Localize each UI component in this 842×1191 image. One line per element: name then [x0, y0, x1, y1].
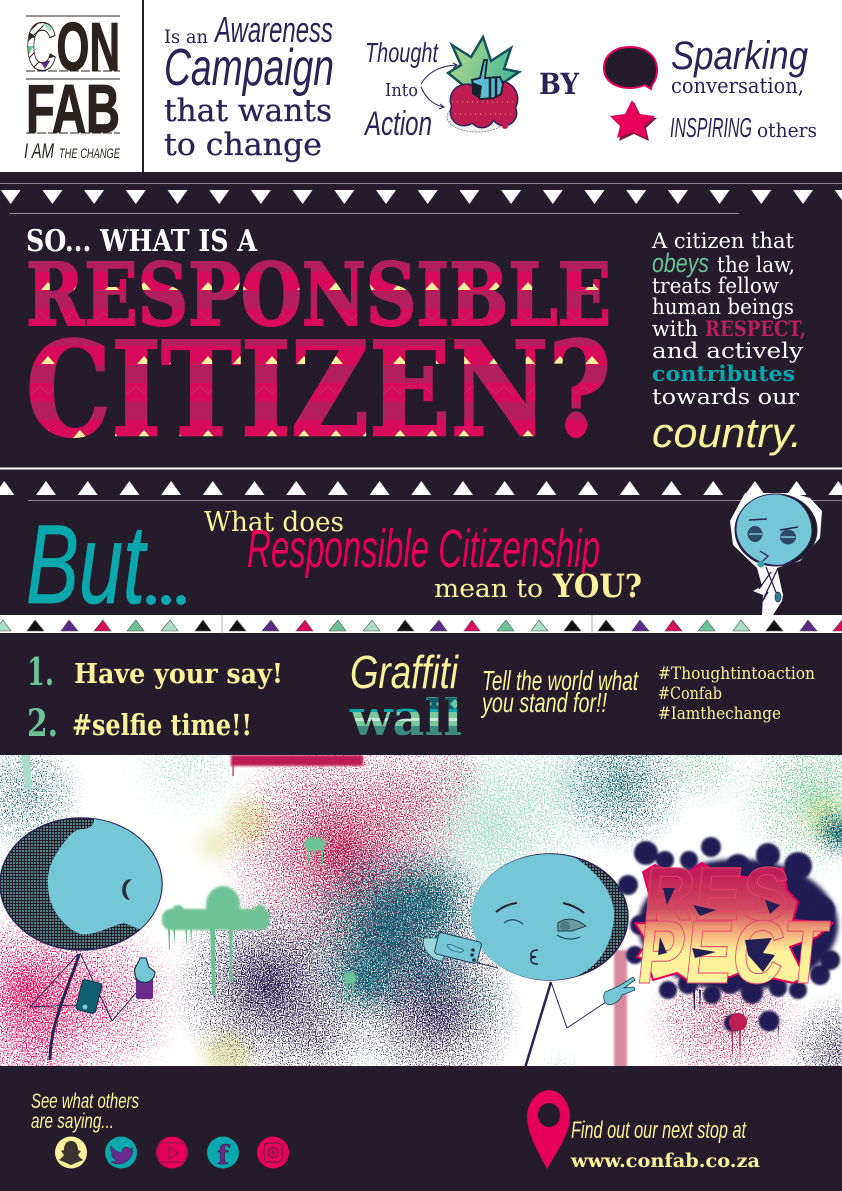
letters: RES [640, 852, 793, 937]
definition text block: and actively [652, 339, 803, 363]
hashtags: #Confab [658, 684, 722, 704]
social heading: See what others [31, 1090, 139, 1113]
spray: teal [0, 755, 842, 1030]
title: citizen: CITIZEN? [26, 313, 611, 466]
graffiti wall heading: Graffiti [350, 646, 459, 698]
definition text block: the law, [717, 253, 795, 277]
heading: so what is a: SO... WHAT IS A [26, 224, 258, 259]
definition text block: with [652, 317, 698, 341]
icon: star [610, 100, 657, 141]
graffiti wall heading [349, 646, 462, 747]
logo: Confab I am the change: I AM [24, 140, 54, 163]
tagline: Tell the world what [482, 665, 639, 696]
campaign statement: Campaign [164, 39, 334, 97]
panel: graffiti wall scene [0, 685, 842, 1125]
panel: but what does it mean to you [26, 493, 822, 627]
logo: Confab I am the change: CON [26, 9, 120, 85]
letters [638, 866, 831, 984]
step 2: 2. [27, 701, 58, 745]
arrows [421, 63, 457, 109]
spray: pale yellow [201, 793, 842, 1079]
red paint bar and drip [231, 755, 363, 776]
thought into action text: Action [364, 105, 432, 143]
character: back of head with spray can [0, 818, 162, 1060]
campaign statement: that wants [164, 93, 332, 129]
panel: what is a responsible citizen [26, 224, 806, 466]
definition text block: treats fellow [652, 274, 779, 298]
green spray tag with drips [162, 837, 356, 1008]
panel: instructions [27, 646, 815, 747]
step 1 [27, 649, 283, 694]
icon: facebook: f [217, 1141, 230, 1171]
definition text block: human beings [652, 295, 794, 319]
definition text block: contributes [652, 361, 795, 386]
definition text block: towards our [652, 385, 800, 409]
tagline [481, 665, 639, 718]
thought into action text: Into [385, 80, 418, 101]
by: BY [539, 67, 579, 101]
paint drops [724, 1010, 780, 1066]
campaign statement [164, 9, 334, 163]
sparking conversation text: conversation, [671, 74, 804, 98]
question text: What does [204, 507, 344, 538]
thought into action text [364, 37, 439, 143]
panel: footer [31, 1090, 760, 1172]
inspiring others text: others [757, 118, 817, 142]
question text [204, 507, 642, 605]
logo: Confab I am the change: FAB [26, 71, 120, 147]
character: thinking head [730, 493, 822, 615]
graffiti: respect piece [618, 837, 840, 1066]
title: responsible: RESPONSIBLE [26, 245, 611, 346]
dark counters [658, 888, 780, 972]
social heading [31, 1090, 139, 1133]
definition text block: country. [652, 409, 802, 456]
question text: mean to [434, 574, 543, 603]
icon: location pin [527, 1090, 570, 1169]
icon: instagram [257, 1136, 289, 1168]
step 1: 1. [27, 649, 54, 694]
character: selfie head [423, 854, 635, 1068]
website: www.confab.co.za [570, 1150, 760, 1172]
definition text block: RESPECT, [705, 316, 806, 341]
graffiti wall heading: wall [349, 688, 462, 747]
spray: crimson [216, 755, 808, 1066]
spray: hot pink [0, 910, 188, 1066]
question text: YOU? [552, 567, 642, 605]
hashtags: #Thoughtintoaction [658, 664, 815, 684]
step 2: #selfie time!! [72, 708, 252, 742]
pale red paint stripe [614, 950, 627, 1070]
thought into action text: Thought [365, 37, 439, 68]
triangle divider: middle [0, 468, 842, 501]
tagline: you stand for!! [481, 687, 607, 718]
step 2 [27, 701, 252, 745]
spray: green [442, 755, 842, 1038]
hashtags: #Iamthechange [658, 704, 781, 724]
piece silhouette [635, 863, 833, 983]
campaign statement: to change [164, 127, 322, 163]
campaign statement: Awareness [214, 9, 333, 50]
definition text block [651, 229, 806, 456]
icon: raised fist burst and brain [447, 37, 519, 132]
icon: youtube [156, 1136, 188, 1168]
header panel [0, 0, 842, 172]
step 1: Have your say! [74, 659, 283, 690]
navy throw-up cloud [618, 837, 840, 1014]
spray: navy [169, 832, 842, 1066]
social heading: are saying... [31, 1110, 114, 1133]
logo: Confab I am the change [24, 9, 120, 163]
campaign statement: Is an [164, 26, 208, 48]
logo: Confab I am the change: THE CHANGE [59, 145, 120, 161]
next stop text: Find out our next stop at [571, 1117, 747, 1144]
inspiring others text: INSPIRING [670, 112, 752, 143]
sparking conversation text: Sparking [671, 34, 808, 78]
icon: speech bubble [604, 47, 657, 89]
sparking conversation text [671, 34, 808, 98]
icon: facebook [207, 1136, 239, 1171]
definition text block: A citizen that [651, 229, 795, 253]
hashtags [658, 664, 815, 724]
spray: mint [121, 755, 635, 1066]
but: But [26, 502, 148, 627]
definition text block: obeys [652, 248, 709, 278]
question text: Responsible Citizenship [247, 519, 600, 579]
icon: twitter [105, 1136, 137, 1168]
icon: snapchat [55, 1136, 87, 1168]
mint paint drip [21, 755, 32, 789]
colourful triangle band [0, 615, 842, 634]
triangle divider: top [0, 183, 842, 214]
ellipsis dots [146, 595, 186, 605]
